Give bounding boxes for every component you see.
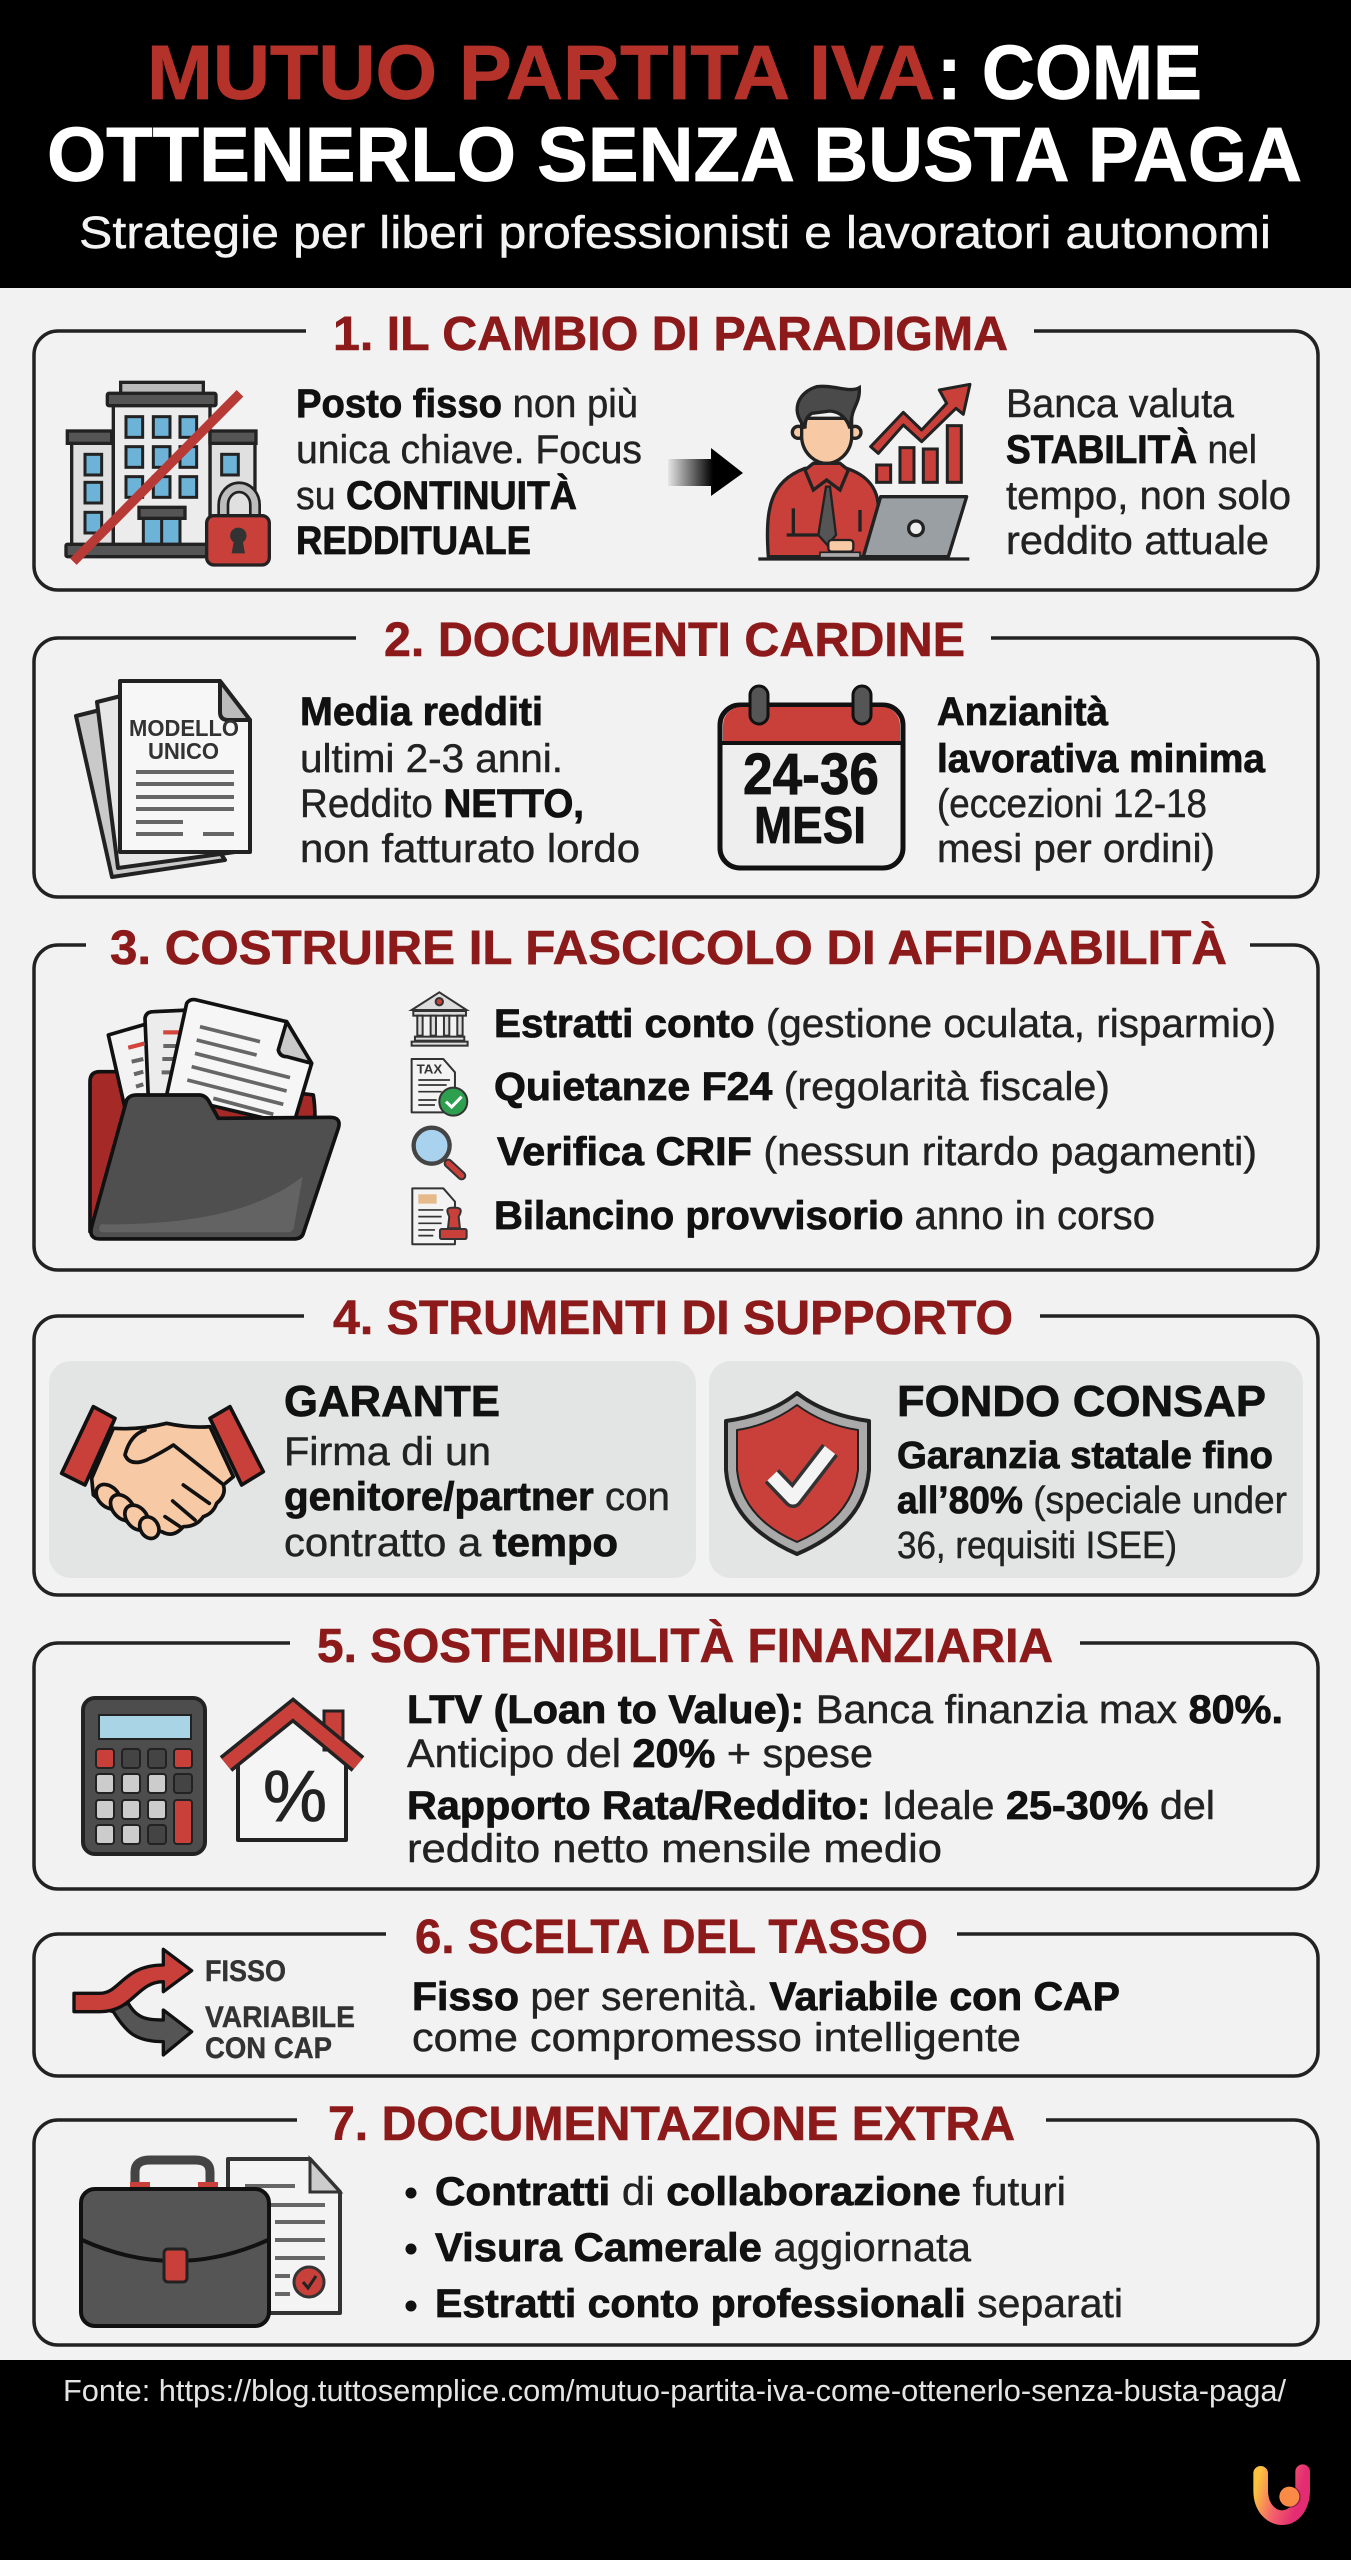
icon: magnifying glass [414,1128,462,1176]
text: firma di un genitore: contratto a tempo [284,1521,618,1565]
icon: calendar 24-36 mesi: 24-36 [743,742,879,807]
text: estratti conto: Estratti conto (gestione oculata, risparmio) [494,1002,1276,1046]
text: anzianita lavorativa: lavorativa minima [937,737,1266,781]
text: banca valuta: STABILITÀ nel [1006,427,1257,472]
text: quietanze f24: Quietanze F24 (regolarità fiscale) [494,1065,1110,1109]
label: garante: GARANTE [284,1377,500,1426]
heading 6: 6. SCELTA DEL TASSO [415,1911,928,1964]
title: : COME [937,30,1202,116]
labels: fisso and variabile [205,1955,355,2065]
text: rapporto rata reddito: reddito netto mensile medio [407,1827,942,1871]
text: garanzia statale [897,1435,1287,1567]
icon: document with stamp [412,1188,467,1244]
icon: tax receipt with check: TAX [417,1061,442,1076]
text: garanzia statale: Garanzia statale fino [897,1435,1273,1477]
text: anzianita lavorativa [937,690,1266,871]
icon: document with seal [228,2159,340,2313]
text: media redditi: ultimi 2-3 anni. [300,737,563,781]
text: rapporto rata reddito [407,1784,1215,1871]
panel 6: scelta del tasso [34,1911,1318,2076]
icon: modello unico document: UNICO [148,738,219,764]
text: firma di un genitore: genitore/partner con [284,1475,670,1519]
panel 5: sostenibilita finanziaria [34,1619,1318,1889]
text: posto fisso [296,382,642,563]
panel 3: fascicolo di affidabilita [34,921,1318,1270]
icon: house with percent [226,1710,358,1840]
text: ltv [407,1688,1283,1776]
panel 4: strumenti di supporto [34,1292,1318,1595]
text: anzianita lavorativa: (eccezioni 12-18 [937,782,1207,826]
list: extra documents: Estratti conto professionali separati [435,2282,1123,2326]
heading 2: 2. DOCUMENTI CARDINE [384,614,965,667]
heading 1: 1. IL CAMBIO DI PARADIGMA [333,308,1008,361]
labels: fisso and variabile: VARIABILE [205,2001,355,2034]
icon: tax receipt with check [412,1059,467,1116]
icon: crossed-out office building with padlock [66,382,269,565]
text: verifica crif: Verifica CRIF (nessun ritardo pagamenti) [497,1130,1257,1174]
text: ltv: Anticipo del 20% + spese [407,1732,873,1776]
text: media redditi: Media redditi [300,690,543,734]
text: bilancino provvisorio: Bilancino provvisorio anno in corso [494,1194,1155,1238]
text: posto fisso: su CONTINUITÀ [296,473,577,518]
text: banca valuta: tempo, non solo [1006,474,1291,518]
text: rapporto rata reddito: Rapporto Rata/Reddito: Ideale 25-30% del [407,1784,1215,1828]
text: fisso per serenita: Fisso per serenità. Variabile con CAP [412,1975,1120,2019]
text: fisso per serenita [412,1975,1120,2060]
list: extra documents [406,2170,1123,2326]
icon: folder with documents [90,1000,339,1239]
text: ltv: LTV (Loan to Value): Banca finanzia max 80%. [407,1688,1283,1732]
heading 3: 3. COSTRUIRE IL FASCICOLO DI AFFIDABILITÀ [110,921,1227,975]
text: garanzia statale: 36, requisiti ISEE) [897,1525,1177,1567]
text: posto fisso: unica chiave. Focus [296,428,642,472]
panel 2: documenti cardine [34,614,1318,897]
heading 4: 4. STRUMENTI DI SUPPORTO [333,1292,1013,1345]
text: firma di un genitore [284,1430,670,1565]
icon: professional with laptop and growth chart [758,384,970,559]
arrow [668,448,743,496]
icon: calculator [83,1698,205,1854]
text: media redditi [300,690,640,871]
card: garante [49,1361,696,1578]
icon: modello unico document [76,681,250,877]
icon: house with percent: % [263,1757,327,1837]
icon: modello unico document: MODELLO [129,715,239,741]
source link text: Fonte: https://blog.tuttosemplice.com/mutuo-partita-iva-come-ottenerlo-senza-busta-paga/ [63,2373,1286,2408]
icon: calendar 24-36 mesi: MESI [754,797,866,855]
text: banca valuta [1006,382,1291,563]
panel 1: il cambio di paradigma [34,308,1318,590]
panel 7: documentazione extra [34,2098,1318,2345]
icon: diverging rate arrows [74,1949,192,2055]
labels: fisso and variabile: CON CAP [205,2032,332,2065]
text: anzianita lavorativa: Anzianità [937,690,1109,734]
subtitle: Strategie per liberi professionisti e lavoratori autonomi [79,207,1271,258]
text: garanzia statale: all’80% (speciale under [897,1480,1287,1522]
icon: bank [412,992,468,1046]
icon: briefcase [81,2160,269,2326]
labels: fisso and variabile: FISSO [205,1955,286,1988]
label: fondo consap: FONDO CONSAP [897,1377,1266,1426]
icon: handshake [62,1407,263,1542]
logo [1261,2472,1303,2518]
list: extra documents: Visura Camerale aggiornata [435,2226,972,2270]
text: firma di un genitore: Firma di un [284,1430,491,1474]
text: anzianita lavorativa: mesi per ordini) [937,827,1215,871]
text: posto fisso: Posto fisso non più [296,382,638,426]
title: OTTENERLO SENZA BUSTA PAGA [47,112,1302,198]
text: media redditi: non fatturato lordo [300,827,640,871]
header band [0,0,1351,288]
text: posto fisso: REDDITUALE [296,519,531,563]
text: fisso per serenita: come compromesso intelligente [412,2016,1021,2060]
heading 7: 7. DOCUMENTAZIONE EXTRA [328,2098,1015,2151]
icon: calendar 24-36 mesi [720,686,903,868]
card: fondo consap [709,1361,1303,1578]
text: banca valuta: Banca valuta [1006,382,1235,426]
heading 5: 5. SOSTENIBILITÀ FINANZIARIA [317,1619,1053,1673]
icon: shield with check [726,1393,869,1554]
title: MUTUO PARTITA IVA [147,30,935,116]
title [47,30,1302,198]
footer band [0,2360,1351,2560]
text: media redditi: Reddito NETTO, [300,782,584,826]
text: banca valuta: reddito attuale [1006,519,1269,563]
list: extra documents: Contratti di collaborazione futuri [435,2170,1066,2214]
